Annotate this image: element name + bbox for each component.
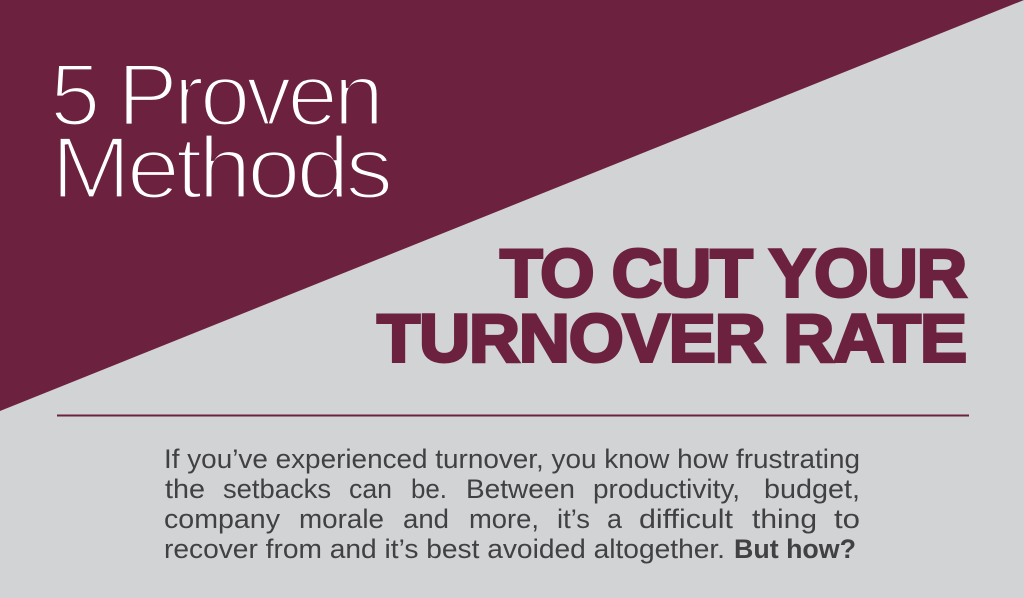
intro paragraph: thing bbox=[752, 504, 817, 534]
intro paragraph: it’s bbox=[557, 504, 590, 534]
intro paragraph: morale bbox=[299, 504, 384, 534]
intro paragraph: the bbox=[165, 474, 205, 504]
intro paragraph: can bbox=[349, 474, 392, 504]
intro paragraph: recover from and it’s best avoided altogether. bbox=[164, 534, 725, 564]
intro paragraph: and bbox=[403, 504, 449, 534]
intro paragraph: company bbox=[164, 504, 281, 534]
title: 5 Proven Methods bbox=[50, 45, 390, 217]
intro paragraph: If you’ve experienced turnover, you know how frustrating bbox=[164, 444, 860, 474]
subtitle: To Cut Your Turnover Rate bbox=[377, 236, 966, 376]
intro paragraph: more, bbox=[469, 504, 539, 534]
intro paragraph: difficult bbox=[639, 504, 734, 534]
intro paragraph: be. bbox=[411, 474, 447, 504]
intro paragraph: budget, bbox=[764, 474, 860, 504]
maroon diagonal panel bbox=[0, 0, 1024, 411]
subtitle: To Cut Your Turnover Rate: TURNOVER RATE bbox=[377, 300, 966, 376]
intro paragraph bbox=[164, 444, 860, 564]
intro paragraph: a bbox=[607, 504, 622, 534]
intro paragraph: But how? bbox=[734, 534, 856, 564]
intro paragraph: setbacks bbox=[223, 474, 331, 504]
title: 5 Proven Methods: 5 Proven bbox=[50, 45, 380, 144]
subtitle: To Cut Your Turnover Rate: TO CUT YOUR bbox=[500, 236, 966, 312]
divider rule bbox=[57, 414, 969, 416]
intro paragraph: to bbox=[834, 504, 860, 534]
intro paragraph: productivity, bbox=[593, 474, 740, 504]
intro paragraph: Between bbox=[466, 474, 575, 504]
title: 5 Proven Methods: Methods bbox=[51, 118, 390, 217]
